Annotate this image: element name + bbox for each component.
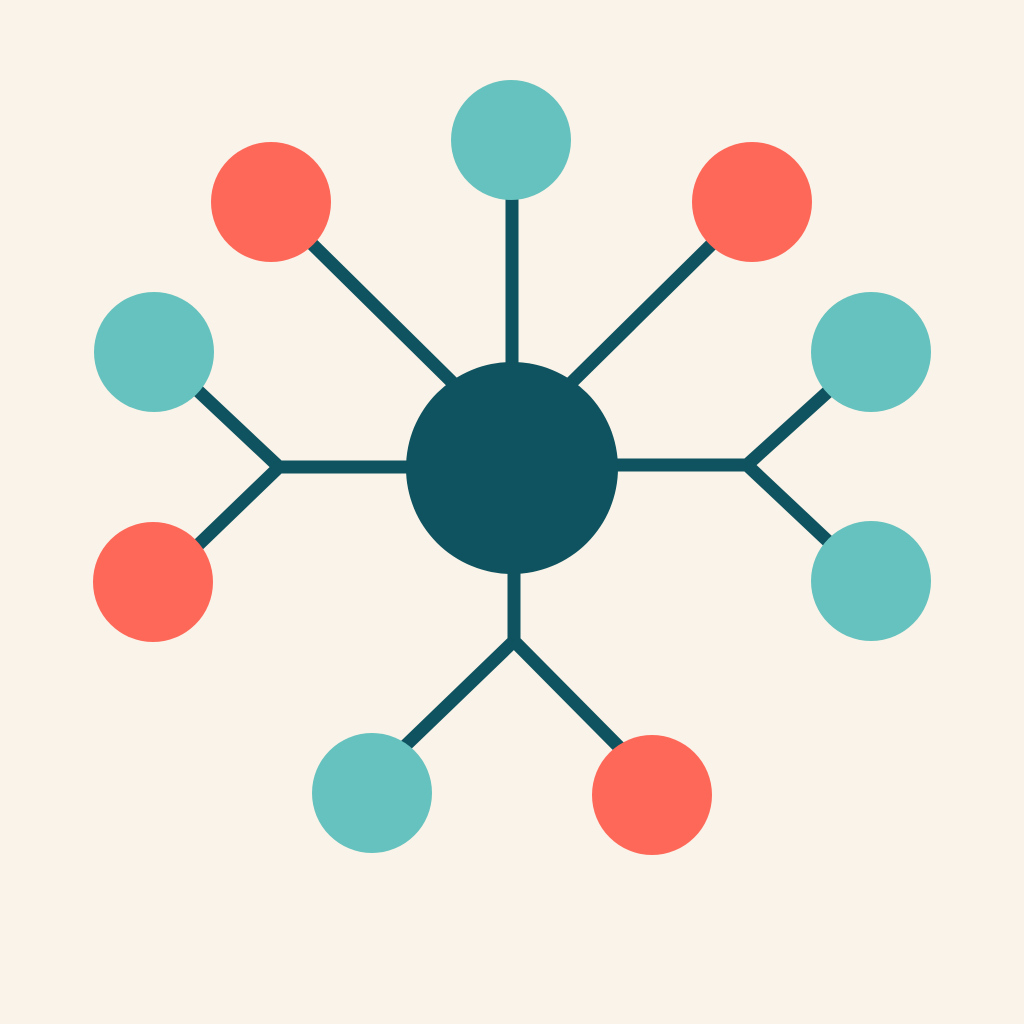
node: top-left red: [211, 142, 331, 262]
node: top teal: [451, 80, 571, 200]
node: right teal upper: [811, 292, 931, 412]
node: right teal lower: [811, 521, 931, 641]
node: left red: [93, 522, 213, 642]
node: top-right red: [692, 142, 812, 262]
node: bottom teal: [312, 733, 432, 853]
node: bottom red: [592, 735, 712, 855]
connector lines: [195, 195, 832, 750]
central hub: [406, 362, 618, 574]
node: left teal: [94, 292, 214, 412]
